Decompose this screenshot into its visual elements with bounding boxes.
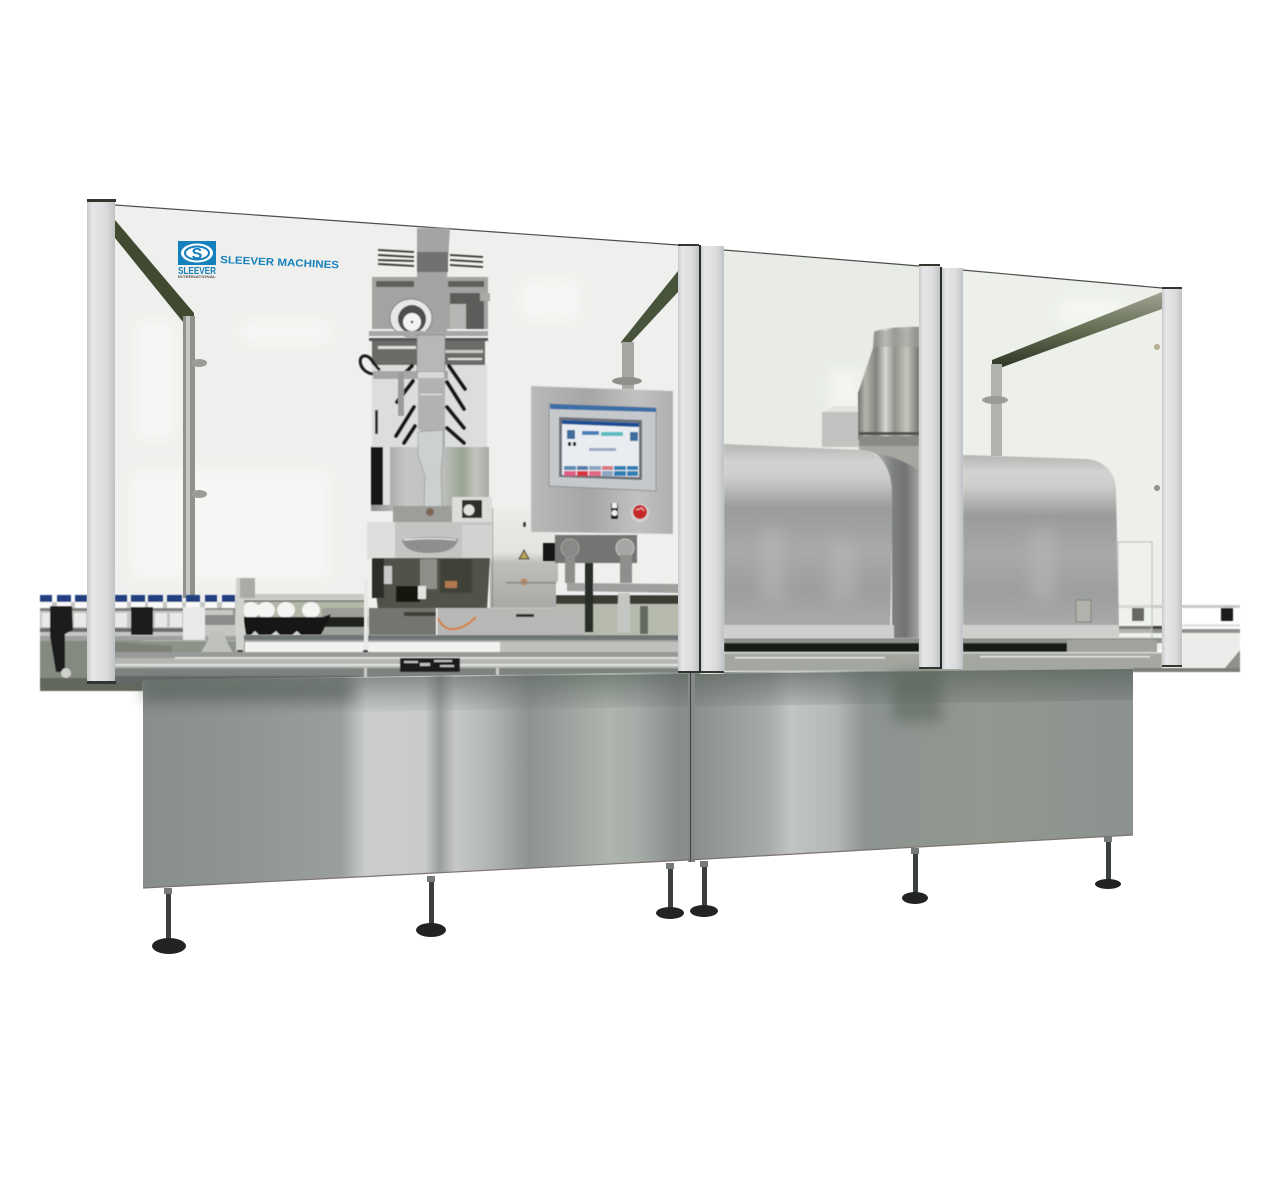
logo badge: S — [192, 246, 203, 263]
progress — [589, 448, 616, 451]
motor — [390, 299, 432, 337]
silver back plate — [490, 508, 558, 608]
cross bars — [369, 331, 488, 336]
white box — [183, 607, 205, 640]
machinery behind bracket — [556, 595, 680, 635]
post centre A — [678, 244, 699, 673]
control bracket — [543, 535, 680, 632]
touch screen bezel — [549, 404, 656, 491]
post far left — [87, 199, 116, 684]
cabinet seam — [688, 670, 695, 862]
right deck slot — [724, 643, 919, 652]
screen tabs — [582, 431, 599, 435]
dark post — [585, 563, 593, 632]
tunnel mottling — [760, 530, 1055, 600]
rear conveyor and bottles — [40, 594, 368, 691]
left cabinet panel — [143, 672, 688, 888]
foot 4 — [690, 861, 718, 917]
conveyor body — [1182, 633, 1240, 668]
adjustable feet — [152, 836, 1121, 954]
stack collar — [859, 446, 919, 472]
service plate — [1076, 600, 1091, 622]
tunnel bend — [873, 452, 919, 638]
bright strip — [245, 642, 680, 652]
bottle guide rails — [40, 608, 184, 611]
tunnel right section — [963, 455, 1119, 638]
guide upright right — [364, 578, 368, 654]
black strip — [371, 447, 383, 505]
logo word INTERNATIONAL: INTERNATIONAL — [178, 275, 217, 279]
horizontal guide — [373, 371, 448, 379]
back strip behind star wheel — [236, 596, 368, 638]
glass panel: left — [115, 205, 678, 650]
left conveyor table — [40, 636, 143, 690]
guide upright left — [236, 578, 244, 654]
lower dark unit — [372, 558, 490, 610]
screen buttons row 1 — [564, 466, 638, 470]
stainless base cabinet — [143, 669, 1133, 888]
screen header — [562, 420, 639, 427]
lower body — [371, 447, 489, 511]
foot 2 — [416, 876, 446, 937]
guard frame: left — [115, 220, 207, 598]
small marker — [523, 522, 526, 527]
key switch — [611, 503, 618, 519]
glass reflections — [130, 280, 1120, 580]
cabinet top shading — [143, 669, 1133, 715]
guard frame: second — [612, 271, 678, 390]
foot 5 — [902, 848, 928, 904]
small glass box — [1118, 542, 1152, 638]
post right — [1162, 287, 1182, 667]
tunnel left section — [724, 444, 893, 638]
sleeve film — [418, 430, 443, 510]
bottle domes at star wheel — [242, 602, 320, 618]
chain — [240, 635, 680, 642]
chimney — [822, 327, 919, 472]
cross plate — [567, 583, 680, 593]
black clamp two — [1221, 608, 1233, 621]
screen — [562, 420, 639, 477]
emergency stop — [631, 504, 649, 522]
post mid B — [940, 267, 963, 669]
small slot strip — [375, 410, 378, 434]
nameplate — [400, 658, 460, 672]
foot 6 — [1095, 836, 1121, 889]
copper fitting — [520, 578, 528, 586]
logo badge — [178, 241, 216, 265]
tunnel skirt left — [724, 625, 894, 638]
right cabinet panel — [695, 669, 1133, 860]
knob block — [452, 497, 492, 523]
conveyor chain — [1118, 629, 1240, 633]
film strip — [418, 378, 444, 430]
glass guards — [115, 205, 1162, 650]
orange cable — [438, 617, 476, 629]
sensor box — [417, 335, 445, 372]
rail band — [87, 652, 680, 660]
arms — [565, 555, 632, 583]
rear back plate — [490, 508, 680, 635]
glass top edges — [115, 205, 1162, 288]
cylinder — [205, 608, 235, 625]
slots left — [396, 366, 465, 443]
guide rail — [1118, 605, 1240, 608]
left deck olive — [87, 641, 245, 657]
bottle caps — [40, 595, 307, 602]
warning triangle — [519, 550, 529, 559]
exit conveyor — [1118, 542, 1240, 672]
top film chute — [417, 228, 450, 336]
screen buttons row 2 — [564, 471, 638, 476]
cabinet reflection — [143, 672, 942, 722]
logo wordmark: SLEEVER MACHINES — [220, 254, 339, 271]
stack — [858, 327, 919, 440]
foot 1 — [152, 888, 186, 954]
star wheel — [243, 614, 331, 635]
disc left — [561, 539, 579, 557]
cabinet bottom edge — [143, 835, 1133, 888]
conveyor chain left — [40, 636, 240, 641]
post centre B — [699, 245, 724, 674]
guide rail upper — [236, 594, 366, 599]
rear duct box — [822, 406, 860, 447]
foot 3 — [656, 863, 684, 919]
bracket arm — [115, 642, 172, 656]
handle — [402, 537, 458, 553]
glass panel: right — [962, 270, 1162, 650]
base plate — [369, 608, 584, 635]
black box — [543, 543, 556, 561]
labelling head — [360, 228, 584, 635]
heat tunnel — [724, 444, 1119, 638]
guard frame: right — [982, 292, 1162, 491]
disc right — [616, 539, 634, 557]
top rack — [378, 250, 483, 267]
tower back frame — [372, 277, 488, 329]
black cable loop — [360, 356, 380, 374]
thumb screw — [61, 668, 71, 678]
handle block — [367, 522, 492, 559]
control panel — [531, 386, 673, 534]
screen black keys — [568, 442, 571, 446]
right deck gap — [724, 638, 1162, 643]
enclosure — [531, 386, 673, 534]
right deck rail — [724, 652, 1162, 671]
body plate — [372, 365, 487, 452]
logo word SLEEVER: SLEEVER — [178, 266, 217, 277]
bell stand — [198, 632, 236, 658]
aluminium posts — [87, 199, 1182, 684]
post mid A — [919, 264, 940, 669]
bottle bodies — [40, 602, 240, 636]
black bracket: second — [131, 607, 153, 635]
black bracket: infeed — [50, 606, 73, 672]
tunnel skirt right — [963, 625, 1119, 638]
clamp block — [555, 535, 637, 563]
black clamp one — [1132, 608, 1144, 621]
screen logos — [567, 430, 575, 439]
logo: Sleever Machines — [178, 241, 339, 279]
glass panel: middle — [724, 250, 919, 650]
conveyor deck — [87, 578, 1162, 682]
slots right — [447, 366, 465, 443]
